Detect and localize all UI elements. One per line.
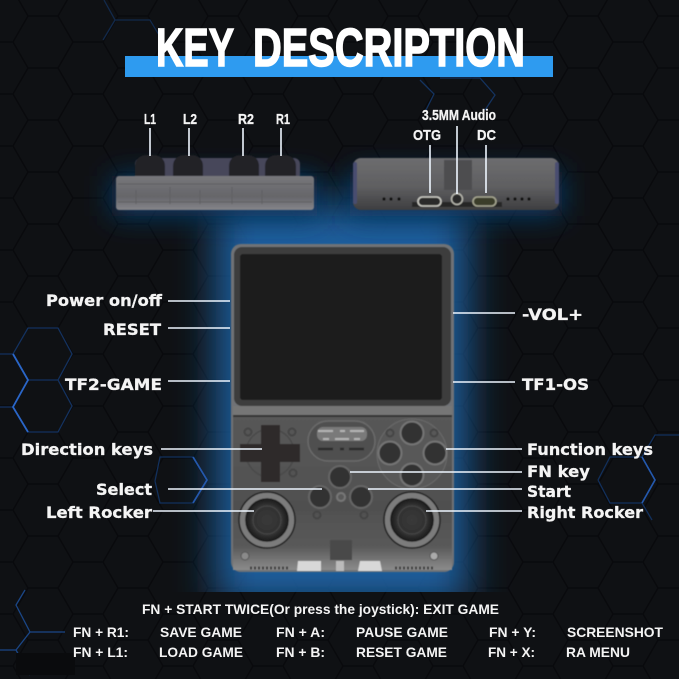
label: L1 [144,111,156,156]
outer shell [231,244,454,572]
shortcut: screenshot: FN + Y: [489,624,536,640]
OTG port [418,197,441,206]
device: main handheld front [231,244,454,572]
label: Direction keys: Direction keys [21,440,153,459]
shortcut: save game: FN + R1: [73,624,129,640]
label: OTG [413,127,441,193]
label: L2 [183,111,197,156]
label: Right Rocker: Right Rocker [527,503,643,522]
trigger buttons [135,155,296,178]
label: TF1-OS: TF1-OS [522,375,589,394]
label: Select: Select [96,480,152,499]
shortcut: reset game: FN + B: [276,644,325,660]
label: Power on/off: Power on/off [46,291,163,310]
shortcut: RA menu [488,644,630,660]
speaker grille [308,421,375,461]
device: shoulder view with L/R triggers [116,155,314,210]
shortcut: screenshot [489,624,663,640]
label: Function keys: Function keys [527,440,653,459]
title: DESCRIPTION [253,18,525,78]
audio jack [452,194,462,204]
shortcut: pause game: FN + A: [276,624,325,640]
screen [240,254,442,400]
d-pad [240,425,300,482]
label: DC [477,127,496,193]
shortcut: pause game [276,624,448,640]
label: R2: R2 [238,111,254,128]
device: top view with ports [353,158,559,210]
shortcut: pause game: PAUSE GAME [356,624,448,640]
label: L2: L2 [183,111,197,128]
label: -VOL+: -VOL+ [522,305,583,324]
bottom dark patch [16,653,75,675]
shortcut: reset game [276,644,447,660]
shortcut: exit game: FN + START TWICE(Or press the joystick): EXIT GAME [142,601,499,617]
shortcut: RA menu: RA MENU [566,644,630,660]
label: Left Rocker: Left Rocker [46,503,152,522]
label: DC: DC [477,127,496,144]
label: R1: R1 [276,111,290,128]
label: RESET: RESET [103,320,161,339]
label: L1: L1 [144,111,156,128]
face buttons [378,422,446,486]
label: TF1-OS [453,375,589,394]
title bar [125,56,553,77]
speaker holes [382,197,531,201]
title [156,18,525,78]
right rocker [384,492,440,548]
shortcut: save game: SAVE GAME [160,624,242,640]
screw posts [244,428,438,518]
label: 3.5MM Audio: 3.5MM Audio [422,107,496,124]
label: R1 [276,111,290,156]
label: FN key: FN key [527,462,591,481]
face button plate [377,419,447,489]
FN, select, start buttons [309,466,372,508]
shortcut: load game: FN + L1: [73,644,128,660]
shortcut: reset game: RESET GAME [356,644,447,660]
label: 3.5MM Audio [422,107,496,194]
background: blue glow behind devices [112,172,562,605]
label: Start: Start [527,482,571,501]
left rocker [239,492,295,548]
shortcut: load game [73,644,243,660]
label: TF2-GAME: TF2-GAME [65,375,162,394]
hinge strip [233,406,452,415]
title: KEY [156,18,234,78]
translucent body [116,176,314,210]
shortcut list [73,601,663,660]
lower translucent body [233,417,452,570]
bottom ports and clips [241,540,438,571]
shortcut: save game [73,624,242,640]
label: OTG: OTG [413,127,441,144]
shortcut: load game: LOAD GAME [159,644,243,660]
DC port [473,197,496,206]
label: RESET [103,320,230,339]
shortcut: RA menu: FN + X: [488,644,535,660]
screen bezel [234,247,451,406]
label: R2 [238,111,254,156]
label: -VOL+ [453,305,583,324]
shortcut: screenshot: SCREENSHOT [567,624,663,640]
